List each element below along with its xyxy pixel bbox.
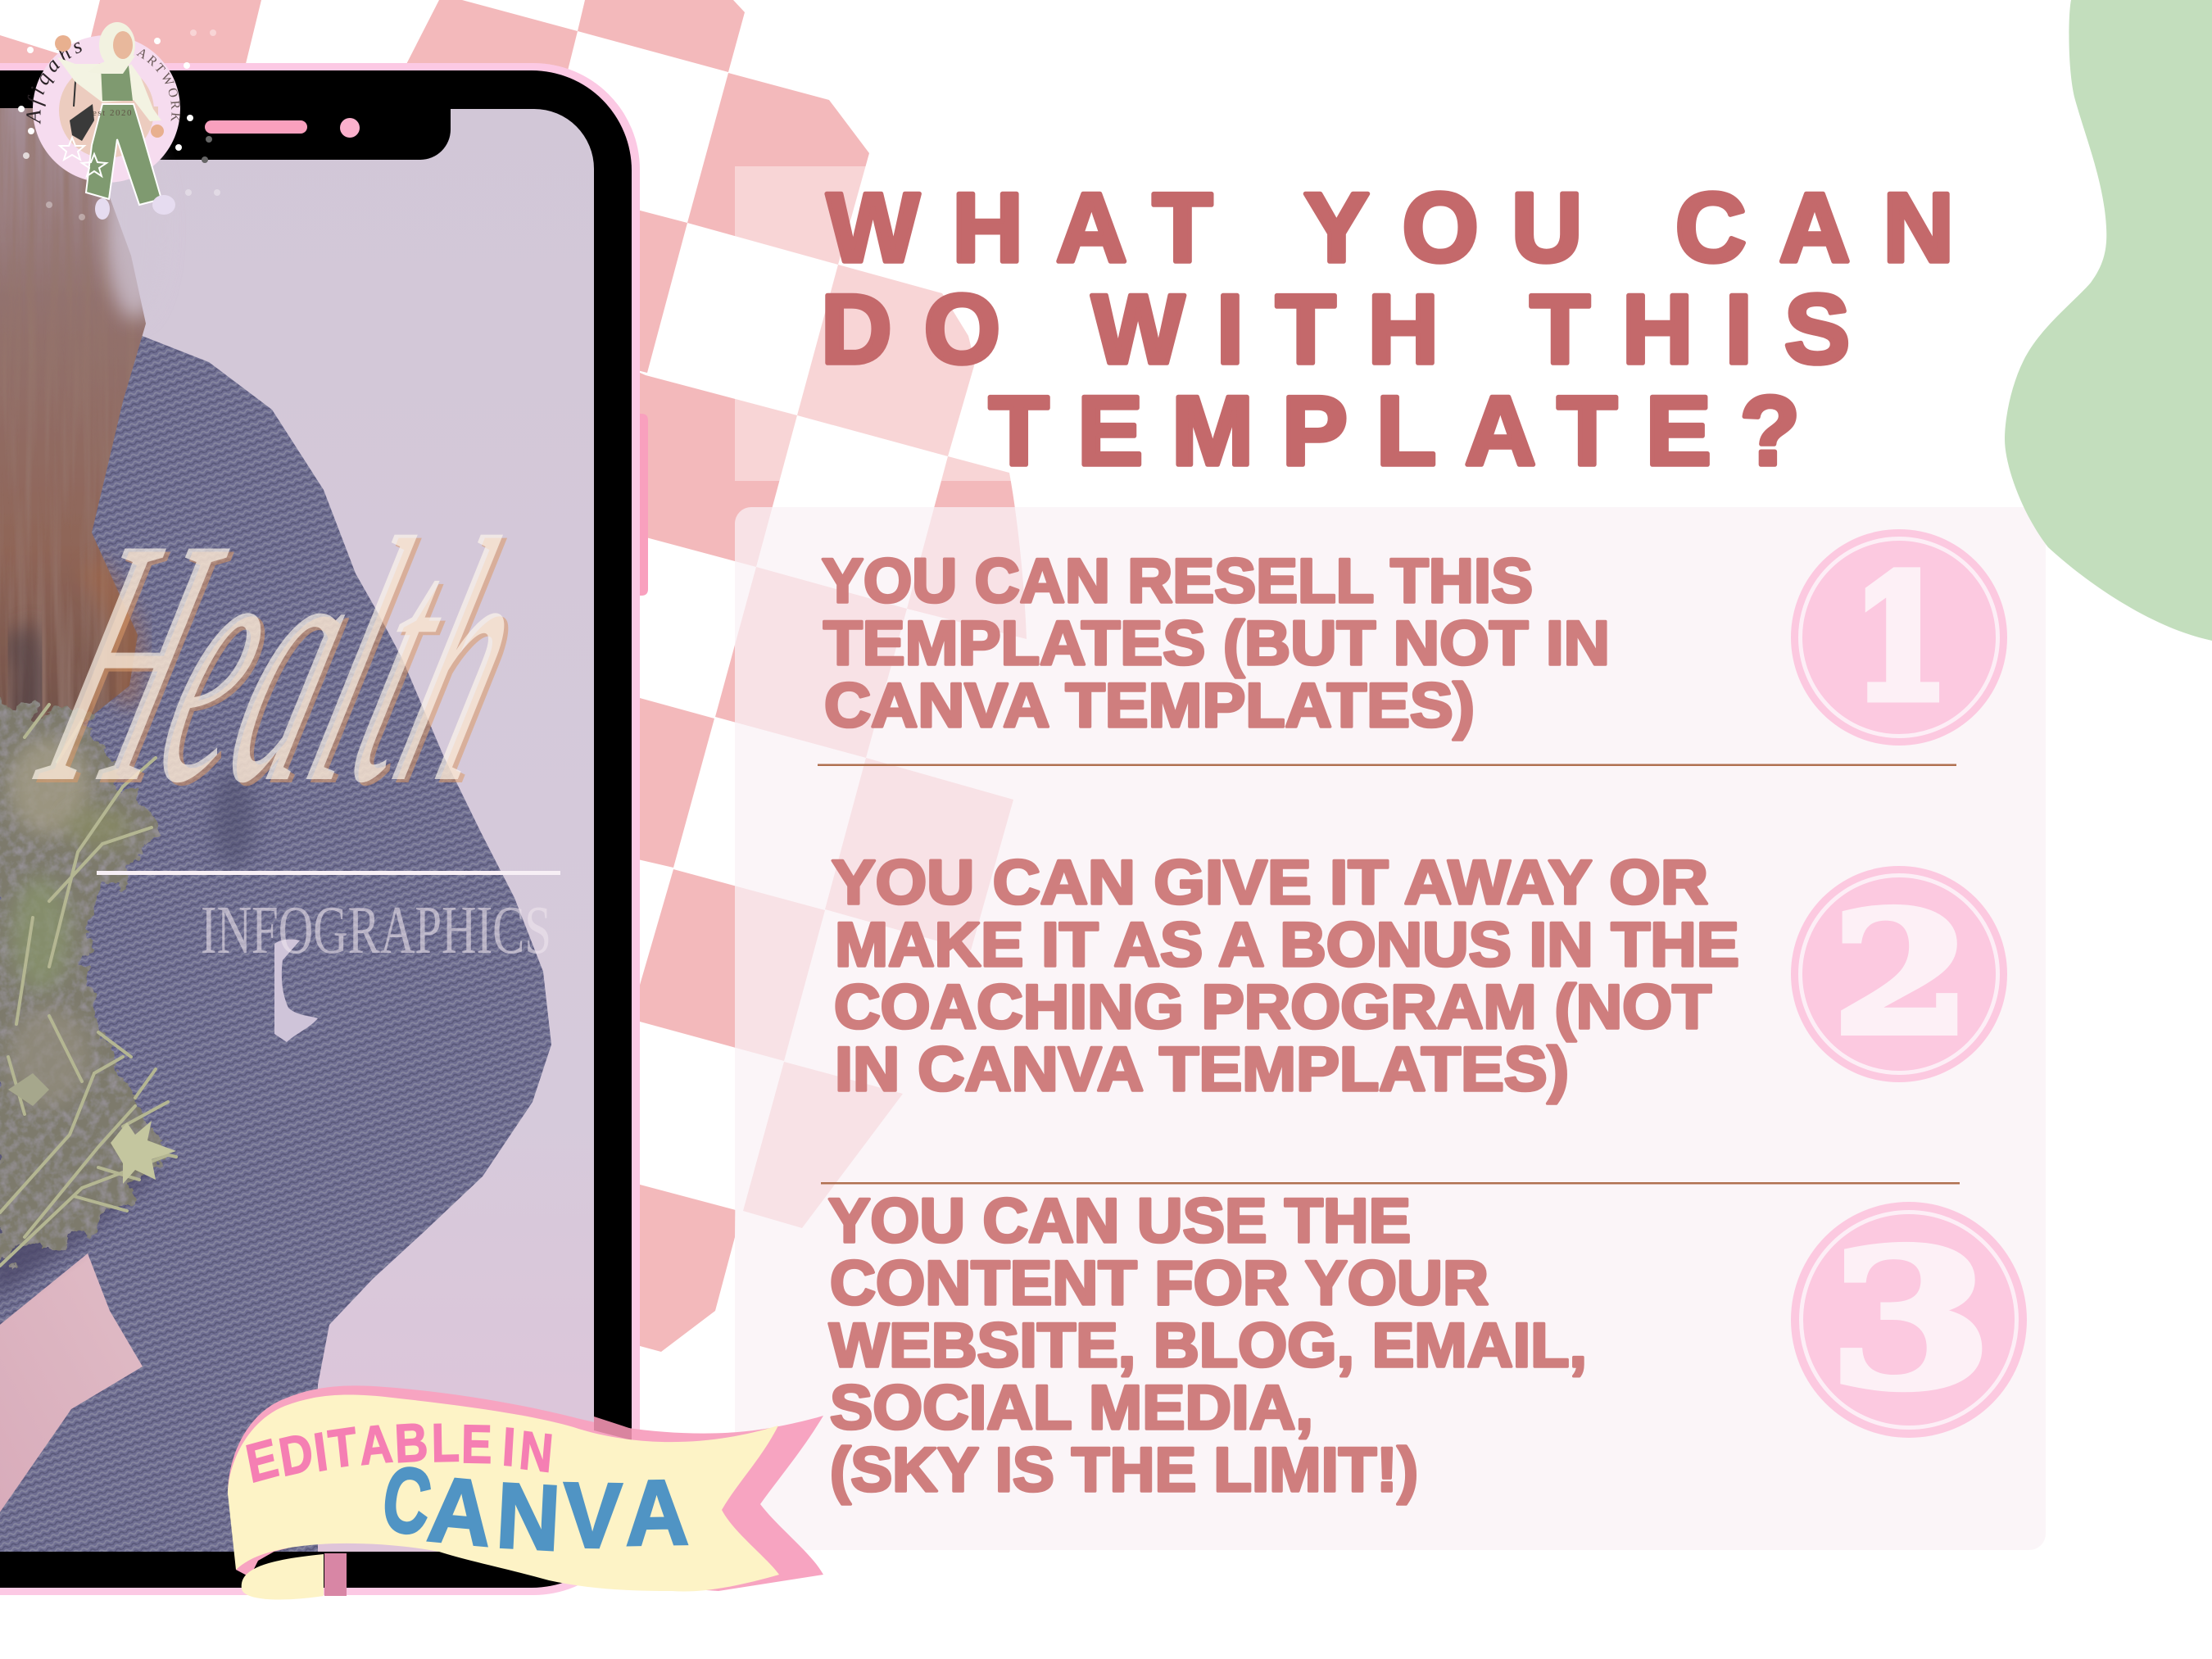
number badge 1	[1791, 529, 2007, 746]
logo est 2020: est 2020	[93, 108, 133, 118]
skin	[0, 1253, 143, 1524]
number badge 3: 3	[1828, 1208, 1993, 1431]
logo badge	[33, 35, 180, 183]
item 2 text: IN CANVA TEMPLATES)	[835, 1035, 1569, 1104]
number badge 3	[1791, 1202, 2027, 1438]
divider 1	[818, 764, 1956, 766]
title: DO WITH THIS	[821, 274, 1850, 384]
title	[821, 173, 1954, 486]
logo lettering	[26, 42, 180, 125]
item 3 text: CONTENT FOR YOUR	[830, 1249, 1489, 1318]
logo figure	[55, 22, 175, 220]
item 2 text: MAKE IT AS A BONUS IN THE	[835, 910, 1739, 980]
screen subtitle: INFOGRAPHICS: INFOGRAPHICS	[201, 892, 551, 968]
logo	[18, 22, 220, 220]
camera dot	[340, 118, 360, 138]
item 1 text: YOU CAN RESELL THIS	[822, 546, 1533, 616]
editable in canva banner	[228, 1385, 823, 1600]
number badge 2: 2	[1831, 875, 1972, 1072]
title: TEMPLATE?	[989, 376, 1800, 486]
banner cream face	[228, 1395, 779, 1592]
banner text: editable in: EDITABLE IN	[242, 1412, 555, 1494]
item 1 text	[822, 546, 1610, 741]
item 3 text: WEBSITE, BLOG, EMAIL,	[829, 1311, 1587, 1380]
banner pink back	[228, 1385, 823, 1591]
banner text: canva: ANVA	[424, 1457, 690, 1571]
hair	[0, 108, 165, 741]
green blob	[2005, 0, 2212, 641]
banner band over frame	[594, 1416, 632, 1440]
phone side button	[631, 414, 648, 596]
banner text: canva: C	[377, 1446, 437, 1555]
phone frame	[0, 63, 640, 1595]
speaker pill	[205, 120, 307, 134]
phone screen photo	[0, 70, 598, 1557]
sweater fold	[212, 770, 255, 868]
sweater	[0, 328, 551, 1557]
item 2 text: COACHING PROGRAM (NOT	[834, 972, 1711, 1042]
notch	[0, 70, 451, 160]
title: WHAT YOU CAN	[827, 173, 1954, 283]
number badge 1: 1	[1853, 541, 1948, 737]
item 3 text: SOCIAL MEDIA,	[830, 1373, 1313, 1443]
item 2 text	[832, 848, 1739, 1104]
screen title: Health: Health	[6, 466, 567, 856]
banner curl	[236, 1547, 283, 1577]
item 3 text: (SKY IS THE LIMIT!)	[830, 1435, 1418, 1505]
title backing panel	[735, 166, 2046, 481]
screen rule	[97, 871, 560, 875]
item 3 text	[828, 1186, 1587, 1505]
logo lettering: ARTWORK	[136, 49, 180, 121]
checkerboard background	[0, 0, 1027, 1352]
logo florals	[18, 29, 220, 220]
number badge 2	[1791, 866, 2007, 1082]
bouquet	[0, 696, 176, 1266]
item 3 text: YOU CAN USE THE	[828, 1186, 1411, 1256]
item 1 text: TEMPLATES (BUT NOT IN	[823, 609, 1610, 678]
dark shade under bouquet	[0, 1154, 161, 1304]
screen title: Health: Health	[10, 469, 571, 859]
divider 2	[821, 1182, 1960, 1185]
item 2 text: YOU CAN GIVE IT AWAY OR	[832, 848, 1708, 918]
logo lettering: Afiqahs	[26, 42, 82, 125]
sleeve hole	[274, 940, 318, 1042]
phone mockup	[0, 63, 648, 1595]
content panel	[735, 507, 2046, 1550]
item 1 text: CANVA TEMPLATES)	[824, 671, 1475, 741]
